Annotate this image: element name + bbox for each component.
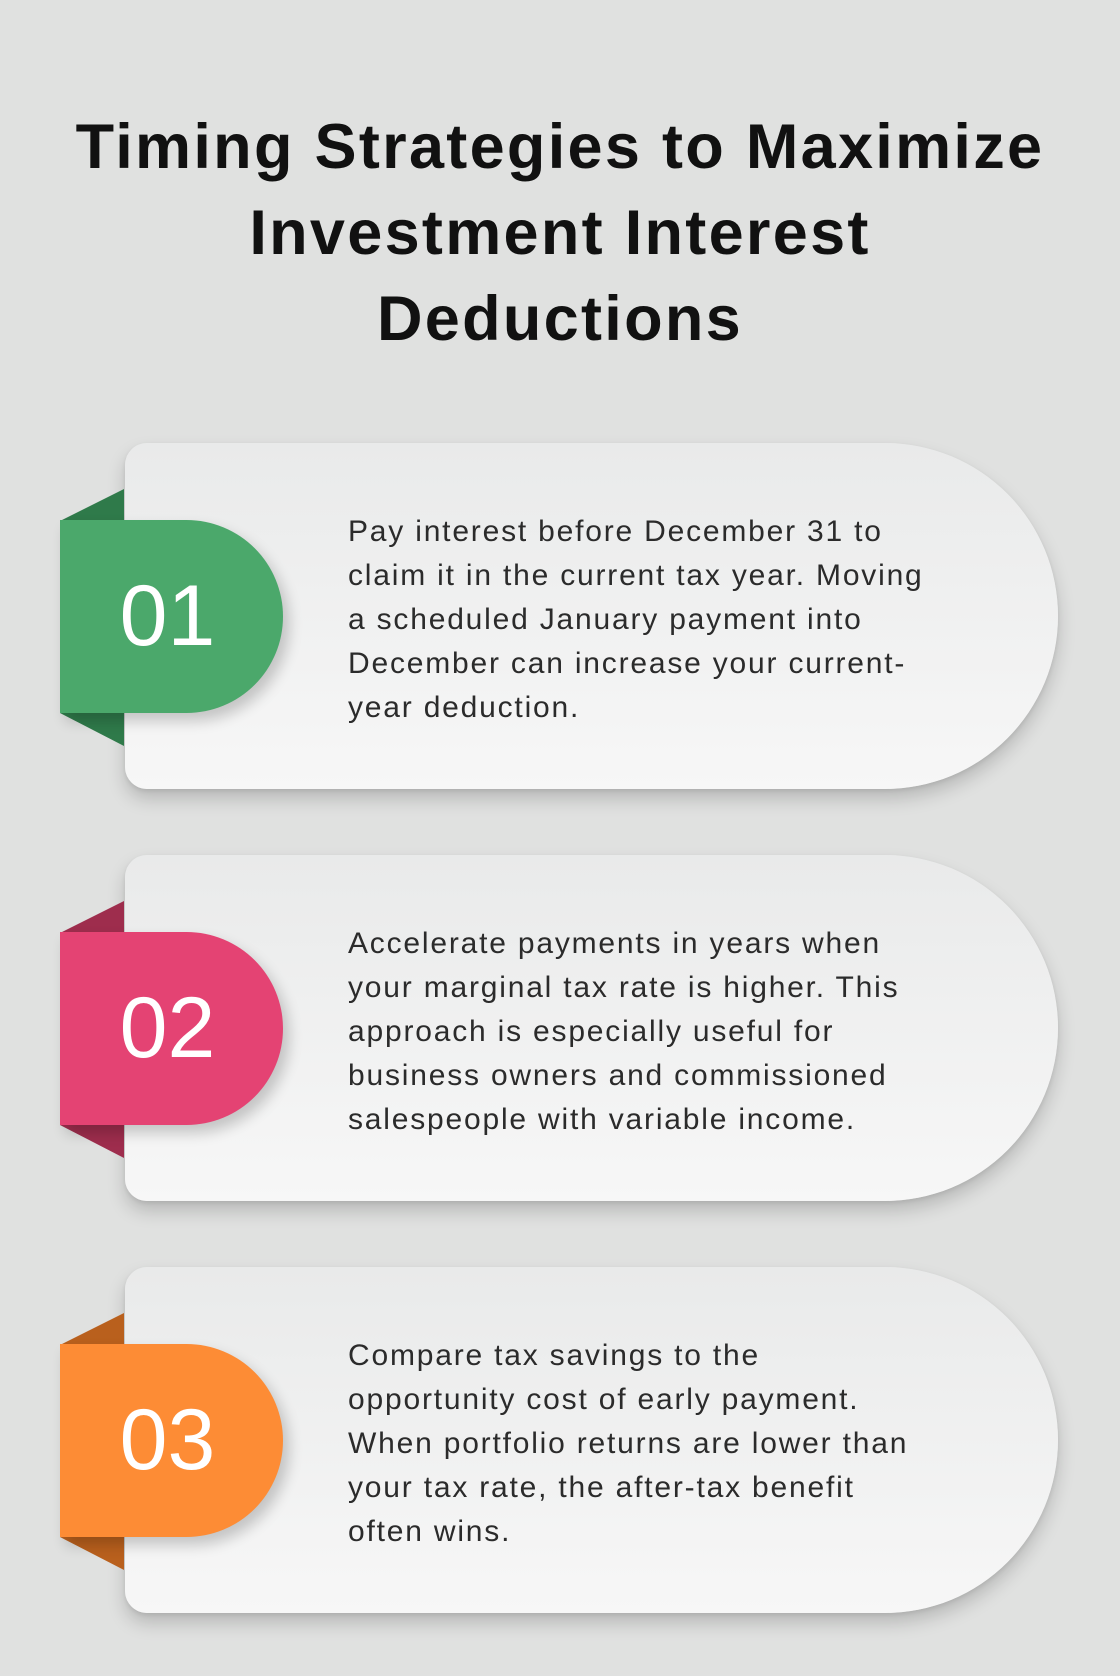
badge 02: [60, 932, 283, 1125]
badge 01: 01: [120, 568, 215, 664]
text: step 1: [348, 515, 924, 724]
text: step 1: year deduction.: [348, 691, 580, 724]
text: step 3: your tax rate, the after-tax benefit: [348, 1471, 855, 1504]
badge 03: 03: [120, 1392, 215, 1488]
text: step 2: your marginal tax rate is higher. This: [348, 971, 899, 1004]
text: step 3: When portfolio returns are lower than: [348, 1427, 908, 1460]
text: step 2: business owners and commissioned: [348, 1059, 888, 1092]
text: step 1: December can increase your current-: [348, 647, 906, 680]
title: Deductions: [377, 284, 743, 354]
text: step 1: claim it in the current tax year. Moving: [348, 559, 924, 592]
card 2: [125, 855, 1058, 1201]
fold top 2: [60, 901, 124, 933]
fold bottom 3: [60, 1537, 124, 1570]
fold bottom 2: [60, 1125, 124, 1158]
title: Timing Strategies to Maximize: [76, 112, 1044, 182]
card 3: [125, 1267, 1058, 1613]
card 1: [125, 443, 1058, 789]
badge 01: [60, 520, 283, 713]
badge 02: 02: [120, 980, 215, 1076]
title: Investment Interest: [249, 198, 871, 268]
text: step 2: Accelerate payments in years when: [348, 927, 881, 960]
fold bottom 1: [60, 713, 124, 746]
text: step 2: approach is especially useful for: [348, 1015, 834, 1048]
fold top 1: [60, 489, 124, 521]
text: step 3: opportunity cost of early payment.: [348, 1383, 859, 1416]
text: step 1: a scheduled January payment into: [348, 603, 863, 636]
text: step 2: [348, 927, 899, 1136]
fold top 3: [60, 1313, 124, 1345]
text: step 2: salespeople with variable income.: [348, 1103, 856, 1136]
text: step 3: Compare tax savings to the: [348, 1339, 760, 1372]
badge 03: [60, 1344, 283, 1537]
title: [76, 112, 1044, 354]
text: step 3: often wins.: [348, 1515, 511, 1548]
text: step 1: Pay interest before December 31 to: [348, 515, 883, 548]
text: step 3: [348, 1339, 908, 1548]
